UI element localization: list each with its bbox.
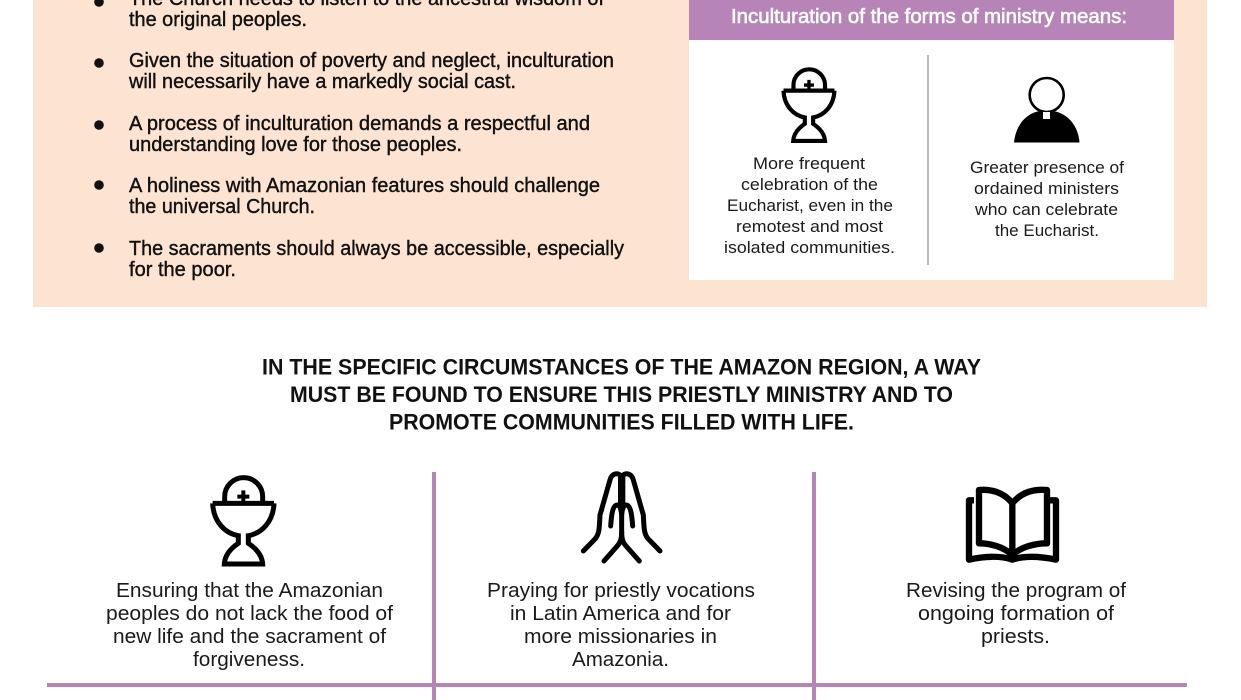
bullet list: understanding love for those peoples.	[129, 133, 462, 156]
text: greater presence	[970, 159, 1124, 240]
text: revising formation: priests.	[981, 626, 1050, 648]
heading: IN THE SPECIFIC CIRCUMSTANCES OF THE AMAZON REGION, A WAY	[262, 354, 981, 380]
bullet list: the original peoples.	[129, 8, 307, 31]
text: more frequent celebration	[724, 155, 895, 257]
bullet list: A holiness with Amazonian features should challenge	[129, 174, 600, 197]
card header	[689, 0, 1174, 40]
text: greater presence: who can celebrate	[974, 201, 1118, 219]
card header: Inculturation of the forms of ministry means:	[731, 6, 1127, 28]
icon: chalice small	[784, 69, 834, 141]
bullet list: will necessarily have a markedly social cast.	[128, 70, 516, 93]
text: more frequent celebration: More frequent	[753, 155, 865, 173]
text: more frequent celebration: remotest and most	[736, 218, 883, 236]
text: praying for vocations: Praying for priestly vocations	[487, 580, 755, 602]
text: praying for vocations: more missionaries in	[524, 626, 717, 648]
heading: MUST BE FOUND TO ENSURE THIS PRIESTLY MINISTRY AND TO	[290, 382, 953, 407]
bullet list	[94, 0, 625, 281]
icon: praying hands	[583, 474, 660, 561]
text: revising formation	[906, 580, 1126, 648]
heading	[262, 354, 981, 434]
text: praying for vocations: Amazonia.	[572, 649, 669, 671]
icon: chalice	[213, 478, 274, 564]
text: more frequent celebration: isolated communities.	[724, 239, 895, 257]
card: forms of ministry	[689, 0, 1174, 280]
panel: inculturation principles	[33, 0, 1207, 307]
text: greater presence: Greater presence of	[970, 159, 1124, 177]
bullet list: the universal Church.	[129, 195, 315, 218]
text: ensuring food of new life	[106, 580, 393, 671]
text: ensuring food of new life: peoples do not lack the food of	[106, 603, 393, 625]
bullet list: The sacraments should always be accessible, especially	[129, 237, 625, 260]
text: praying for vocations: in Latin America and for	[510, 603, 731, 625]
heading: PROMOTE COMMUNITIES FILLED WITH LIFE.	[389, 410, 854, 434]
bullet list: A process of inculturation demands a respectful and	[129, 112, 590, 135]
text: revising formation: Revising the program of	[906, 580, 1126, 602]
text: revising formation: ongoing formation of	[918, 603, 1114, 625]
text: ensuring food of new life: Ensuring that the Amazonian	[116, 580, 383, 602]
icon: open book	[969, 490, 1056, 560]
text: ensuring food of new life: new life and the sacrament of	[113, 626, 386, 648]
text: greater presence: the Eucharist.	[995, 222, 1099, 240]
text: more frequent celebration: Eucharist, even in the	[727, 197, 893, 215]
bullet list: for the poor.	[129, 258, 236, 281]
icon: priest	[1014, 78, 1080, 142]
text: ensuring food of new life: forgiveness.	[193, 649, 305, 671]
bullet list: Given the situation of poverty and neglect, inculturation	[129, 49, 614, 72]
text: praying for vocations	[487, 580, 755, 671]
text: more frequent celebration: celebration of the	[741, 176, 878, 194]
text: greater presence: ordained ministers	[974, 180, 1119, 198]
